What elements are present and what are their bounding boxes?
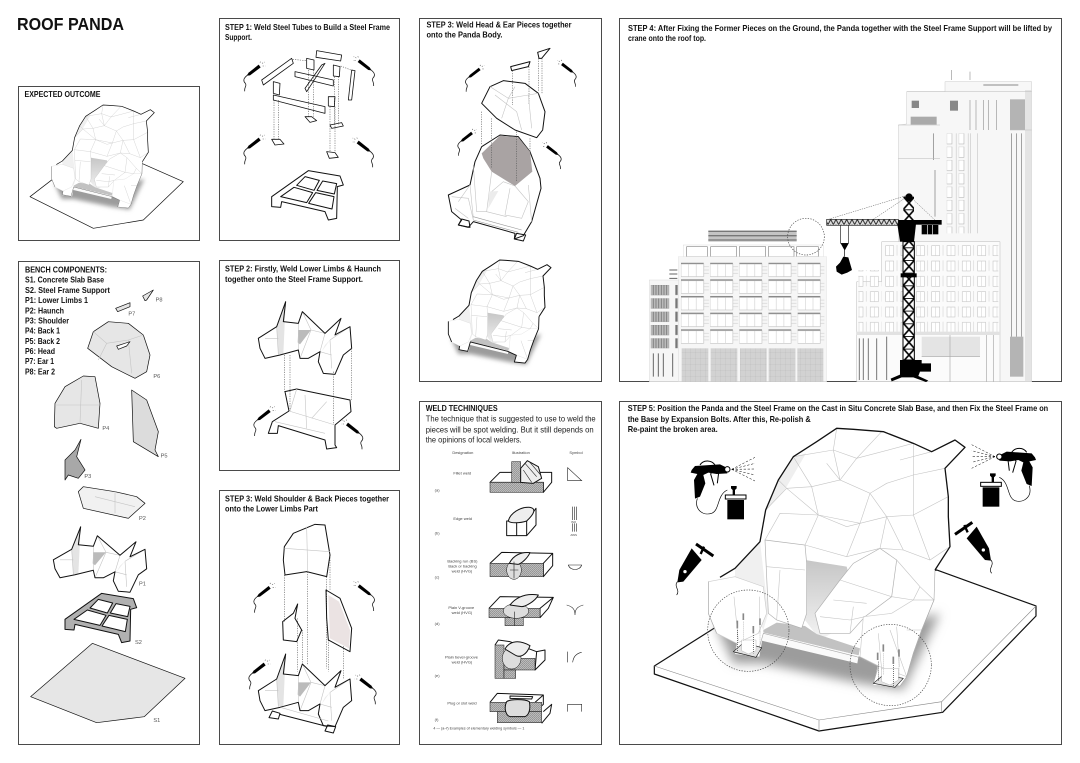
P8 ear 2: P8 [156, 297, 163, 303]
component list: P2: Haunch [25, 306, 64, 315]
component list: P3: Shoulder [25, 316, 70, 326]
row e: bevel groove: (e) [435, 673, 440, 678]
P5 back 2 [132, 390, 168, 459]
row d: V-groove [435, 595, 583, 626]
component list: S1. Concrete Slab Base [25, 276, 104, 284]
illustration: buildings and crane [649, 70, 1032, 382]
heading: step 2: STEP 2: Firstly, Weld Lower Limbs & Haunch [225, 265, 381, 274]
P6 head [88, 322, 160, 380]
icon: left spray gun [691, 457, 755, 519]
panda [708, 428, 965, 690]
S2 steel frame [65, 593, 142, 646]
panel: step 3 head and ears [420, 18, 602, 382]
P2 haunch: P2 [139, 516, 146, 522]
heading: step 1: STEP 1: Weld Steel Tubes to Build a Steel Frame [225, 23, 390, 32]
P7 ear 1 [116, 303, 135, 318]
heading: step 3 shoulder and back: onto the Lower Limbs Part [225, 505, 318, 514]
chart: elementary welding symbols [433, 450, 583, 731]
row e: bevel groove: weld (HVG) [452, 659, 473, 664]
row c: backing run: weld (HVG) [452, 569, 473, 574]
component list: S2. Steel Frame Support [25, 286, 110, 295]
panel: step 4 [620, 18, 1062, 382]
row d: V-groove: weld (HVG) [452, 610, 473, 615]
illustration: panda on slab [30, 105, 183, 228]
detail circle: right anchor [850, 624, 931, 706]
column headers [452, 450, 583, 455]
paragraph: weld technique description: The technique that is suggested to use to weld the [426, 414, 596, 424]
icon: left polisher [676, 544, 713, 595]
row b: edge weld: (b) [435, 530, 440, 535]
diagram: exploded steel tubes [244, 51, 374, 220]
column headers: Illustration [512, 450, 530, 455]
tower [898, 70, 1032, 382]
component list: P7: Ear 1 [25, 357, 54, 366]
heading: step 3 head and ears [426, 21, 572, 40]
column headers: Symbol [569, 450, 583, 455]
component list: P4: Back 1 [25, 327, 60, 336]
row b: edge weld: Edge weld [453, 516, 472, 521]
heading: step 4: crane onto the roof top. [628, 34, 706, 43]
heading: step 3 shoulder and back [225, 495, 390, 514]
concrete slab [654, 570, 1036, 731]
panel: step 1 [220, 18, 400, 240]
P3 shoulder: P3 [84, 474, 91, 480]
P4 back 1 [54, 376, 109, 432]
paragraph: weld technique description [426, 414, 596, 445]
heading: step 5 [628, 404, 1048, 434]
heading: step 4: STEP 4: After Fixing the Former Pieces on the Ground, the Panda together with the Steel Frame Support will be lifted by [628, 24, 1052, 33]
P1 lower limbs [53, 527, 147, 592]
row a: fillet weld [435, 461, 582, 493]
paragraph: weld technique description: pieces will be spot welding. But it still depends on [426, 424, 594, 434]
component list: BENCH COMPONENTS: [25, 266, 107, 274]
heading: step 3 head and ears: STEP 3: Weld Head & Ear Pieces together [426, 21, 572, 30]
paragraph: weld technique description: the opinions of local welders. [426, 435, 522, 445]
panel: bench components [18, 262, 200, 744]
diagram: shoulder and back pieces over limbs [249, 524, 376, 733]
tower crane with panda [827, 193, 942, 382]
component list [25, 266, 110, 376]
heading: step 1: Support. [225, 33, 252, 42]
S2 steel frame: S2 [135, 640, 142, 646]
title: ROOF PANDA [17, 14, 124, 34]
heading: step 5: Re-paint the broken area. [628, 425, 718, 434]
diagram: head and ears exploded above body [448, 48, 576, 365]
row c: backing run: (c) [435, 574, 440, 579]
row b: edge weld [435, 507, 577, 537]
component list: P1: Lower Limbs 1 [25, 296, 88, 305]
heading: step 3 shoulder and back: STEP 3: Weld Shoulder & Back Pieces together [225, 495, 390, 504]
P4 back 1: P4 [102, 426, 109, 432]
diagram: limbs over haunch and frame [254, 302, 363, 449]
panel: weld techniques [420, 402, 602, 744]
row b: edge weld: ISO [571, 520, 577, 524]
heading: step 5: the Base by Expansion Bolts. After this, Re-polish & [628, 415, 811, 424]
P7 ear 1: P7 [128, 312, 135, 318]
P6 head: P6 [153, 374, 160, 380]
panel: step 3 shoulder and back [220, 490, 400, 744]
exploded components [31, 290, 185, 724]
highlight circle [788, 218, 824, 255]
icon: right polisher [955, 522, 992, 573]
row e: bevel groove [435, 640, 582, 678]
heading: step 1 [225, 23, 390, 42]
P3 shoulder [65, 439, 91, 480]
heading: step 2 [225, 265, 381, 284]
row c: backing run: Back or backing [448, 564, 477, 569]
P2 haunch [78, 487, 146, 522]
row d: V-groove: (d) [435, 621, 440, 626]
right mid-rise building [857, 242, 1000, 382]
row f: plug or slot weld [435, 693, 582, 723]
S1 concrete slab [31, 643, 185, 724]
panel: step 2 [220, 260, 400, 470]
row c: backing run: Backing run (BS) [447, 559, 478, 564]
component list: P8: Ear 2 [25, 367, 55, 376]
heading: expected outcome: EXPECTED OUTCOME [24, 90, 101, 99]
panel: step 5 [620, 402, 1062, 744]
P5 back 2: P5 [161, 453, 168, 459]
heading: step 2: together onto the Steel Frame Support. [225, 275, 363, 284]
P8 ear 2 [143, 290, 163, 303]
left building [649, 231, 827, 382]
component list: P6: Head [25, 347, 55, 356]
row d: V-groove: Plain V-groove [448, 605, 475, 610]
row f: plug or slot weld: Plug or slot weld [447, 700, 477, 705]
row a: fillet weld: Fillet weld [453, 470, 471, 475]
figure caption: 4 — (a–f) Examples of elementary welding symbols — 1 [433, 727, 524, 731]
heading: step 3 head and ears: onto the Panda Body. [426, 31, 502, 40]
row f: plug or slot weld: (f) [435, 717, 439, 722]
icon: right spray gun [972, 445, 1036, 507]
component list: P5: Back 2 [25, 337, 60, 346]
panel: expected outcome [18, 86, 200, 240]
row b: edge weld: AWS [570, 533, 577, 537]
row e: bevel groove: Plain bevel-groove [445, 654, 479, 659]
row a: fillet weld: (a) [435, 488, 440, 493]
heading: step 4 [628, 24, 1052, 43]
illustration: panda on slab with bolts and tools [654, 428, 1036, 731]
P1 lower limbs: P1 [139, 582, 146, 588]
heading: weld techniques: WELD TECHINIQUES [426, 404, 498, 413]
column headers: Designation [452, 450, 473, 455]
S1 concrete slab: S1 [153, 718, 160, 724]
detail circle: left anchor [708, 590, 789, 671]
row c: backing run [435, 552, 582, 579]
